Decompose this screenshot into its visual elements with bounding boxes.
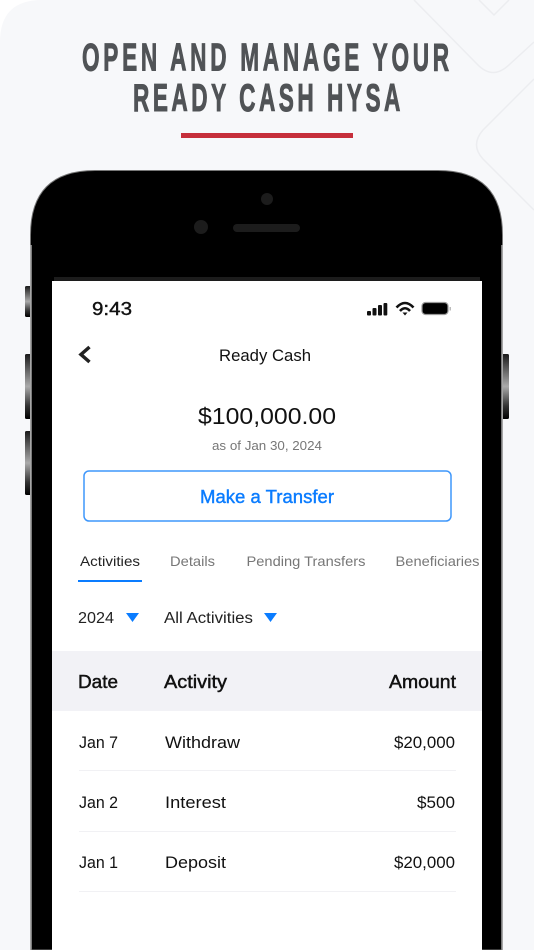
row: Jan 7: Jan 7 [79,734,118,752]
row: Jan 1: $20,000 [394,854,455,872]
screen title: Ready Cash [219,347,311,365]
tabs [78,553,480,582]
filters [78,610,277,627]
row: Jan 7: $20,000 [394,734,455,752]
balance: as of Jan 30, 2024 [212,438,322,453]
phone body [30,170,502,950]
balance [198,403,336,453]
title: READY CASH HYSA [133,76,400,120]
row: Jan 2: $500 [417,794,455,812]
table header: Activity [164,672,227,692]
wifi icon [396,303,414,316]
red divider [181,133,353,138]
tabs: Pending Transfers [246,553,366,569]
earpiece speaker [233,224,300,232]
signal icon [367,303,387,316]
transfer button: Make a Transfer [200,487,334,507]
title: OPEN AND MANAGE YOUR [82,35,449,79]
clock: 9:43 [92,298,132,319]
row: Jan 7 [79,734,455,752]
back chevron [81,347,90,362]
phone [25,170,509,950]
screen [52,281,482,950]
title [82,35,449,120]
row: Jan 7: Withdraw [165,734,240,752]
row: Jan 1 [79,854,455,872]
front camera [261,193,273,205]
side buttons [25,286,509,495]
row: Jan 1: Deposit [165,854,226,872]
decorative diamonds [414,0,534,210]
filters: All Activities [164,610,253,627]
battery icon [422,302,451,314]
table header: Date [78,672,118,692]
tabs: Beneficiaries [396,553,480,569]
row: Jan 1: Jan 1 [79,854,118,872]
sensor [194,220,208,234]
row: Jan 2: Interest [165,794,226,812]
row: Jan 2 [79,794,455,812]
tabs: Activities [80,553,140,569]
activity table [52,651,482,892]
table header: Amount [389,672,456,692]
balance: $100,000.00 [198,403,336,429]
table header [52,651,482,711]
active tab underline [78,580,142,582]
transfer button [84,471,451,521]
status bar [92,298,451,319]
filters: 2024 [78,610,114,627]
tabs: Details [170,553,215,569]
navigation bar [81,347,311,365]
row: Jan 2: Jan 2 [79,794,118,812]
